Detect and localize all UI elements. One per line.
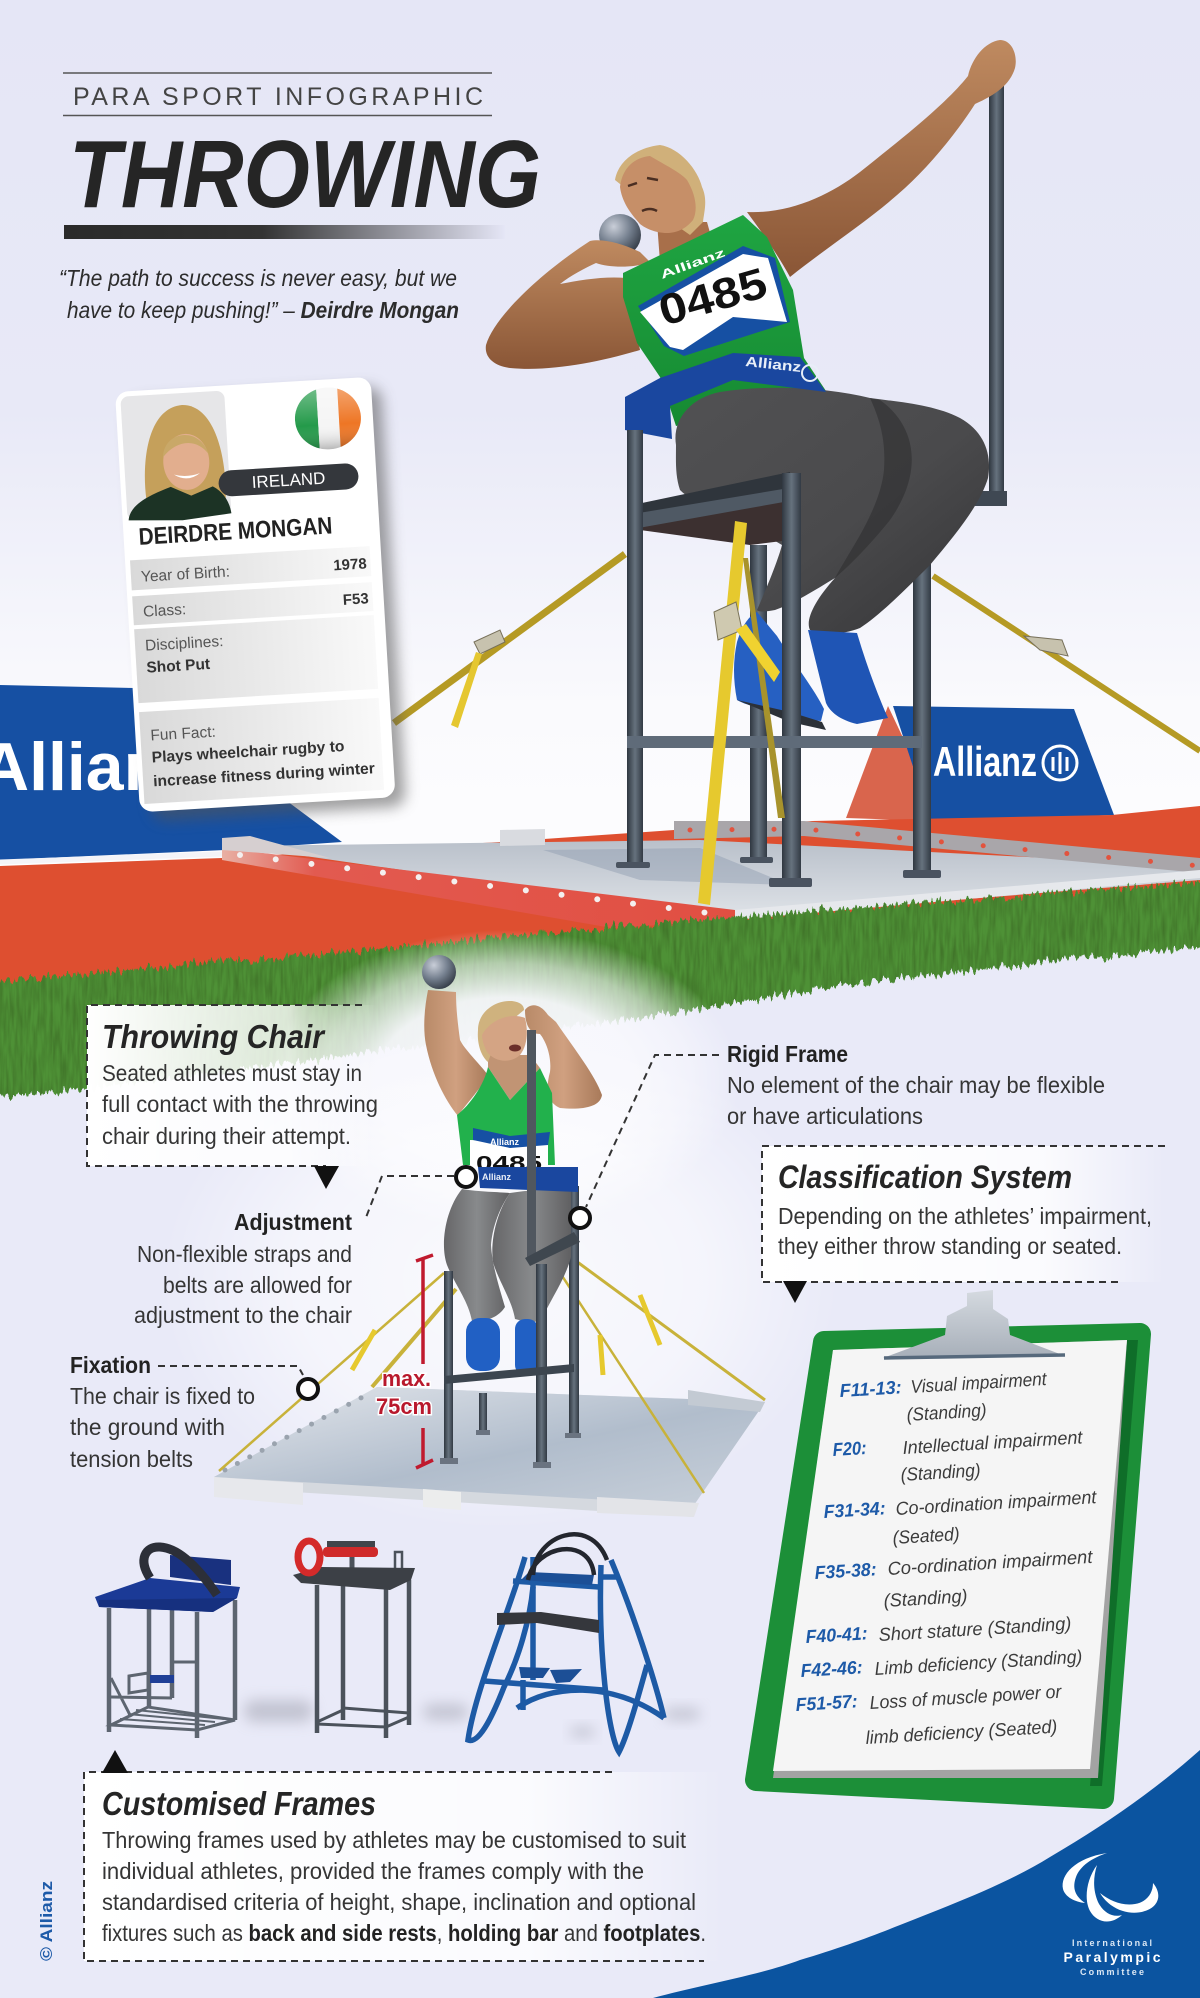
- chair rear legs: [740, 545, 941, 878]
- F51-57: F51-57:: [795, 1690, 858, 1715]
- description: tension belts: [70, 1446, 193, 1472]
- F42-46: [800, 1646, 1083, 1681]
- F40-41: Short stature (Standing): [878, 1613, 1072, 1645]
- floor shadows: [244, 1700, 700, 1737]
- knee shading: [835, 398, 912, 578]
- description: or have articulations: [727, 1103, 923, 1129]
- F42-46: Limb deficiency (Standing): [874, 1646, 1083, 1679]
- glow behind lower chair: [160, 1030, 840, 1530]
- arm holding pole: [747, 40, 1016, 277]
- diagram: athlete front view with max height: [214, 955, 765, 1517]
- logo text: Paralympic: [1064, 1949, 1161, 1965]
- F20: F20:: [832, 1437, 867, 1460]
- description: The chair is fixed to: [70, 1383, 255, 1409]
- main title: THROWING: [69, 121, 541, 228]
- cone: orange marker: [846, 706, 932, 821]
- heading: Customised Frames: [102, 1785, 376, 1822]
- holding pole: [975, 79, 1007, 506]
- neck and chest: [488, 1055, 540, 1100]
- corner: blue swoosh: [653, 1750, 1200, 1998]
- tension belts: [219, 1261, 765, 1493]
- quote: [59, 265, 459, 323]
- F51-57: Loss of muscle power or: [869, 1681, 1063, 1713]
- athlete profile card: [115, 376, 406, 822]
- clip edge: [884, 1355, 1065, 1358]
- description: full contact with the throwing: [102, 1091, 378, 1117]
- F31-34: F31-34:: [823, 1497, 886, 1522]
- F35-38: Co-ordination impairment: [887, 1546, 1094, 1579]
- row: class: Class:: [143, 601, 187, 621]
- grass fade: [270, 930, 740, 1230]
- F31-34: Co-ordination impairment: [895, 1486, 1098, 1519]
- grass strip: [0, 880, 1200, 1100]
- panel: classification system: [762, 1146, 1165, 1303]
- description: [727, 1072, 1105, 1129]
- marker: [456, 1167, 476, 1187]
- yellow adjustment strap: [698, 521, 785, 905]
- heading: Adjustment: [234, 1209, 352, 1235]
- track stripe: [0, 854, 222, 862]
- face: [482, 1016, 527, 1061]
- description: the ground with: [70, 1414, 225, 1440]
- bib 0485: [638, 245, 790, 356]
- paper stack: [773, 1340, 1127, 1778]
- F51-57: [795, 1681, 1063, 1748]
- flag: Ireland: [295, 388, 361, 450]
- description: [70, 1383, 255, 1472]
- heading: Fixation: [70, 1352, 151, 1378]
- shot put ball: [599, 214, 641, 256]
- arm to pole: [525, 1005, 602, 1109]
- clip: [883, 1290, 1065, 1358]
- F11-13: (Standing): [906, 1399, 987, 1425]
- description: No element of the chair may be flexible: [727, 1072, 1105, 1098]
- country pill: IRELAND: [251, 469, 326, 492]
- banner: Allianz left: [0, 685, 342, 860]
- marker: [570, 1208, 590, 1228]
- head front: [478, 1001, 540, 1100]
- bib 0485: Allianz: [658, 245, 727, 282]
- max height marker: max.: [382, 1366, 431, 1391]
- description: standardised criteria of height, shape, inclination and optional: [102, 1889, 696, 1915]
- description: [778, 1203, 1152, 1259]
- legs front: [444, 1189, 571, 1322]
- F35-38: F35-38:: [814, 1558, 877, 1583]
- row: year of birth: 1978: [333, 555, 367, 574]
- box dashes: [762, 1146, 1165, 1282]
- description: Depending on the athletes’ impairment,: [778, 1203, 1152, 1229]
- chair back and base: [476, 1186, 581, 1438]
- description: Non-flexible straps and: [137, 1241, 352, 1267]
- F11-13: [839, 1368, 1048, 1425]
- waist belt front: [478, 1167, 578, 1192]
- logo text: [1064, 1938, 1161, 1977]
- heading rules: [63, 73, 492, 116]
- logo: International Paralympic Committee: [1063, 1853, 1161, 1977]
- leader line: [365, 1176, 454, 1220]
- heading: Rigid Frame: [727, 1041, 848, 1067]
- max height marker: 75cm: [376, 1394, 432, 1419]
- bib 0485: 0485: [654, 259, 772, 336]
- card shadow: [128, 386, 406, 822]
- mouth: [509, 1044, 521, 1052]
- box dashes: [84, 1772, 704, 1961]
- description: they either throw standing or seated.: [778, 1233, 1122, 1259]
- bib front: Allianz: [490, 1137, 520, 1147]
- F31-34: [823, 1486, 1098, 1548]
- paper: [773, 1340, 1127, 1771]
- box fill: [84, 1772, 724, 1961]
- marker: [298, 1379, 318, 1399]
- board shade: [1090, 1340, 1138, 1786]
- eyes and mouth: [628, 178, 658, 211]
- description: [102, 1060, 378, 1149]
- F42-46: F42-46:: [800, 1656, 863, 1681]
- row: fun fact: Fun Fact:: [150, 724, 216, 744]
- F20: Intellectual impairment: [902, 1426, 1084, 1458]
- row: class: [132, 582, 373, 625]
- logo text: Committee: [1080, 1967, 1144, 1977]
- description: adjustment to the chair: [134, 1302, 352, 1328]
- chair: blue padded: [95, 1547, 240, 1738]
- bib front: 0485: [476, 1153, 542, 1175]
- pointer: [102, 1750, 128, 1773]
- face: [620, 156, 696, 233]
- shoes front: [466, 1318, 538, 1375]
- panel: throwing chair: [87, 1005, 378, 1189]
- throwing platform: [222, 821, 1200, 928]
- description: chair during their attempt.: [102, 1123, 351, 1149]
- bib front: [470, 1128, 550, 1175]
- running track: [0, 806, 1200, 990]
- description: fixtures such as back and side rests, holding bar and footplates.: [102, 1920, 706, 1946]
- chair front frame: [616, 430, 922, 887]
- kicker: PARA SPORT INFOGRAPHIC: [73, 83, 483, 111]
- legs: [675, 388, 989, 634]
- waist belt: [625, 353, 826, 439]
- row: fun fact: [139, 698, 384, 804]
- panel: customised frames: [84, 1750, 724, 1961]
- neck: [657, 222, 712, 262]
- row: disciplines: Disciplines:: [145, 633, 224, 655]
- callout: rigid frame: [570, 1041, 1105, 1228]
- F11-13: Visual impairment: [910, 1368, 1048, 1397]
- F51-57: limb deficiency (Seated): [865, 1716, 1058, 1748]
- description: [134, 1241, 352, 1328]
- F31-34: (Seated): [892, 1523, 960, 1548]
- F20: (Standing): [900, 1459, 981, 1485]
- logo text: International: [1072, 1938, 1152, 1948]
- row: year of birth: [130, 546, 371, 590]
- head: [615, 145, 712, 262]
- banner: Allianz right: [893, 706, 1114, 821]
- F20: [832, 1426, 1084, 1485]
- raised arm with ball: [422, 955, 488, 1116]
- leader line: [158, 1366, 303, 1375]
- row: fun fact: Plays wheelchair rugby to: [151, 738, 345, 766]
- icon: agitos: [1063, 1853, 1158, 1922]
- portrait: [120, 391, 232, 523]
- description: individual athletes, provided the frames comply with the: [102, 1858, 644, 1884]
- main athlete on throwing chair: [394, 40, 1200, 905]
- F11-13: F11-13:: [839, 1376, 902, 1401]
- row: disciplines: Shot Put: [146, 656, 211, 677]
- quote: “The path to success is never easy, but we: [59, 265, 457, 291]
- pointer: [783, 1281, 807, 1303]
- heading: Throwing Chair: [102, 1018, 326, 1055]
- country pill: [218, 463, 359, 497]
- background: lower panel: [0, 940, 1200, 1998]
- F35-38: (Standing): [883, 1585, 968, 1611]
- box fill: [762, 1146, 1165, 1282]
- pointer: [314, 1166, 339, 1189]
- arm holding ball: [486, 240, 650, 369]
- row: disciplines: [134, 615, 378, 703]
- row: fun fact: increase fitness during winter: [153, 760, 375, 790]
- shoes: [734, 612, 888, 730]
- row: year of birth: Year of Birth:: [141, 564, 230, 586]
- description: belts are allowed for: [163, 1272, 352, 1298]
- tension straps: [394, 554, 1200, 751]
- clipboard: [756, 1290, 1140, 1798]
- background: sky: [0, 0, 1200, 980]
- description: Throwing frames used by athletes may be customised to suit: [102, 1827, 687, 1853]
- title block: [63, 73, 541, 239]
- chair: blue curved frame: [468, 1534, 664, 1752]
- chair frame front: [440, 1030, 580, 1468]
- waist belt: Allianz: [745, 353, 802, 375]
- jersey: [623, 215, 826, 426]
- board: [756, 1334, 1140, 1798]
- heading: Classification System: [778, 1159, 1072, 1195]
- description: Seated athletes must stay in: [102, 1060, 362, 1086]
- row: class: F53: [342, 590, 369, 609]
- customised chair examples: [95, 1534, 700, 1752]
- card body: [115, 377, 396, 812]
- platform: [214, 1387, 765, 1517]
- F40-41: [805, 1613, 1072, 1647]
- classes list: [795, 1368, 1098, 1748]
- title underline: [64, 225, 505, 239]
- banner: Allianz right: Allianz: [933, 738, 1037, 785]
- callout: adjustment: [134, 1167, 476, 1328]
- box dashes: [87, 1005, 362, 1166]
- box fill: [87, 1005, 377, 1166]
- waist belt front: Allianz: [482, 1172, 512, 1182]
- hair: [615, 145, 705, 235]
- chair: dark with red rests: [293, 1541, 415, 1738]
- jersey front: [457, 1067, 555, 1165]
- callout: fixation: [70, 1352, 318, 1472]
- F35-38: [814, 1546, 1094, 1611]
- athlete name: DEIRDRE MONGAN: [138, 512, 333, 551]
- description: [102, 1827, 706, 1946]
- F40-41: F40-41:: [805, 1622, 868, 1647]
- hair: [478, 1001, 524, 1062]
- quote: have to keep pushing!” – Deirdre Mongan: [67, 297, 459, 323]
- leader line: [586, 1055, 719, 1207]
- max height marker: [376, 1255, 433, 1468]
- copyright: © Allianz: [37, 1881, 56, 1961]
